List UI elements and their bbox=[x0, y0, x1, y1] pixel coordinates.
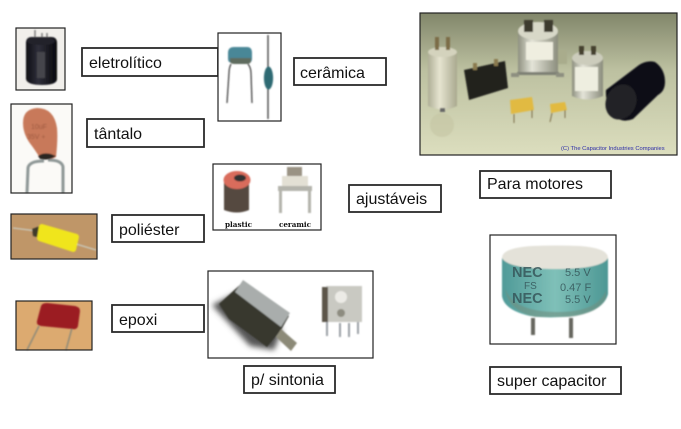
image: supercapacitor: 5.5 V bbox=[565, 267, 591, 279]
label: eletrolítico: eletrolítico bbox=[89, 55, 162, 72]
image: supercapacitor: 0.47 F bbox=[560, 282, 591, 294]
image: tantalum capacitor bbox=[11, 104, 72, 193]
label: ajustáveis bbox=[349, 185, 441, 212]
image: ceramic capacitors bbox=[218, 33, 281, 121]
label: cerâmica: cerâmica bbox=[300, 65, 365, 82]
image: tuning capacitors bbox=[208, 271, 373, 358]
label: super capacitor bbox=[490, 367, 621, 394]
image: tantalum capacitor: 35V + bbox=[27, 134, 46, 141]
image: trimmer capacitors bbox=[213, 164, 321, 230]
label: eletrolítico bbox=[82, 48, 218, 76]
image: trimmer capacitors: plastic bbox=[225, 220, 252, 229]
image: motor capacitors bbox=[420, 13, 677, 155]
label: tântalo bbox=[87, 119, 204, 147]
image: epoxy capacitor bbox=[16, 301, 92, 350]
label: poliéster bbox=[112, 215, 204, 242]
image: supercapacitor: NEC bbox=[512, 265, 543, 281]
label: tântalo: tântalo bbox=[94, 126, 142, 143]
label: epoxi bbox=[112, 305, 204, 332]
label: Para motores bbox=[480, 171, 611, 198]
label: cerâmica bbox=[294, 58, 386, 85]
image: supercapacitor: FS bbox=[524, 281, 537, 292]
label: Para motores: Para motores bbox=[487, 176, 583, 193]
image: trimmer capacitors: ceramic bbox=[279, 220, 311, 229]
image: polyester capacitor bbox=[11, 214, 97, 259]
image: supercapacitor: 5.5 V bbox=[565, 294, 591, 306]
image: supercapacitor bbox=[490, 235, 616, 344]
image: tantalum capacitor: 10uF bbox=[31, 124, 47, 131]
label: super capacitor: super capacitor bbox=[497, 373, 607, 390]
label: ajustáveis: ajustáveis bbox=[356, 191, 427, 208]
image: supercapacitor: NEC bbox=[512, 291, 543, 307]
label: poliéster: poliéster bbox=[119, 222, 180, 239]
label: epoxi: epoxi bbox=[119, 312, 157, 329]
label: p/ sintonia: p/ sintonia bbox=[251, 372, 324, 389]
image: motor capacitors: (C) The Capacitor Industries Companies bbox=[561, 146, 665, 152]
label: p/ sintonia bbox=[244, 366, 335, 393]
image: electrolytic capacitor bbox=[16, 28, 65, 90]
